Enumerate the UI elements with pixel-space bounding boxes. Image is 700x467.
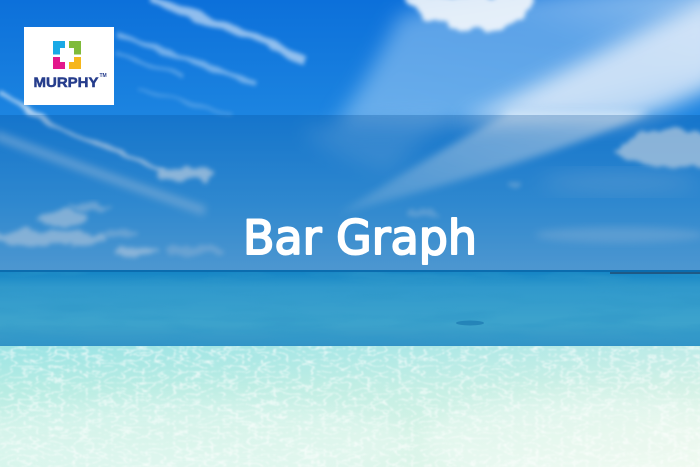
wide cirrus fan, upper right (335, 0, 700, 125)
scattered low clouds (160, 168, 212, 182)
shallow water (0, 346, 700, 467)
logo wordmark: MURPHY (34, 74, 99, 90)
title: Bar Graph (243, 211, 477, 266)
fan continuing through band (338, 112, 650, 214)
translucent title band (0, 115, 700, 346)
sea (0, 271, 700, 351)
logo (24, 27, 114, 105)
trademark: TM (100, 73, 107, 79)
icon: four-colour cross (53, 41, 81, 69)
puffy cloud, top (405, 0, 535, 30)
thin cirrus, left (150, 0, 305, 62)
